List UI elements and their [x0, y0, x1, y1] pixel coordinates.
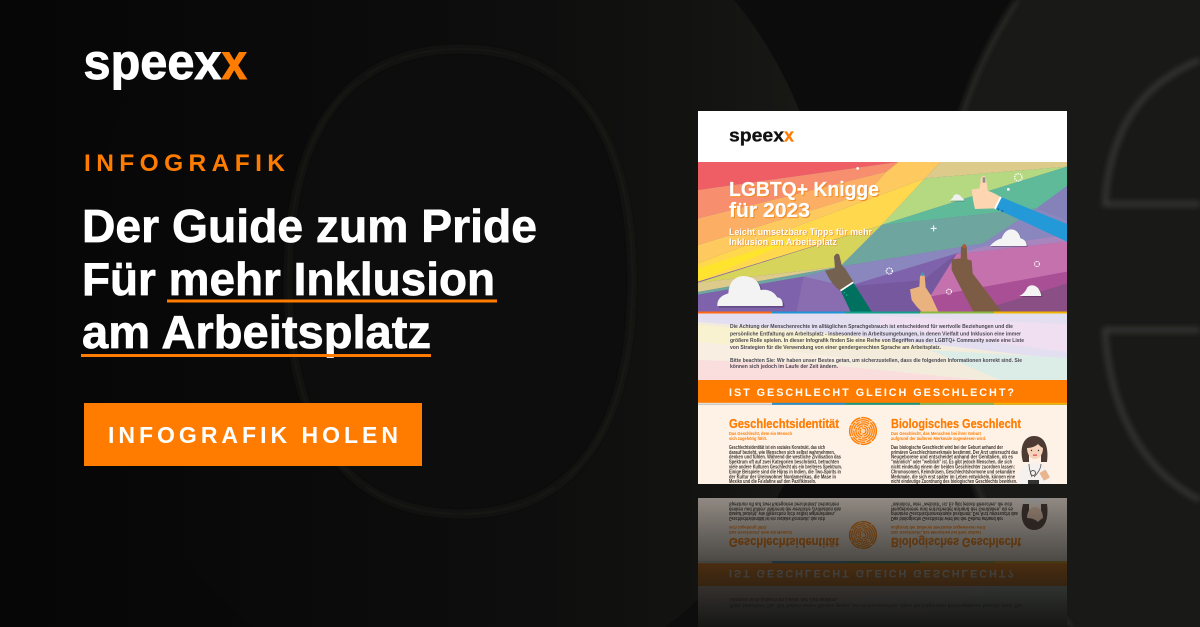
column: Biologisches Geschlecht: [891, 417, 1022, 485]
panel: intro text on pastel stripes: größere Rolle spielen. In dieser Infografik finden Sie eine Reihe von Begriffen aus der LGBTQ+ Community sowie eine Liste: [730, 338, 1025, 344]
logo: speexx: speex: [84, 34, 222, 90]
hero subtitle: Inklusion am Arbeitsplatz: [729, 237, 837, 247]
main headline: Der Guide zum Pride: [82, 200, 537, 252]
column: Biologisches Geschlecht: "männlich" oder "weiblich" ist. Es gibt jedoch Menschen, die sich: [891, 460, 1012, 466]
document header with logo: speex: [729, 124, 785, 146]
hero title: für 2023: [729, 199, 810, 222]
mirrored reflection of the document: Geschlechtsidentität: [729, 535, 840, 549]
column: Biologisches Geschlecht: Chromosomen, Keimdrüsen, Geschlechtshormone und sekundäre: [891, 469, 1015, 475]
logo: speexx: x: [222, 34, 247, 90]
column: Geschlechtsidentität: Mexiko und die Fa'afafine auf den Pazifikinseln.: [729, 479, 816, 485]
mirrored reflection of the document: "männlich" oder "weiblich" ist. Es gibt jedoch Menschen, die sich: [891, 500, 1012, 506]
section banner: IST GESCHLECHT GLEICH GESCHLECHT?: [729, 387, 1014, 399]
mirrored reflection of the document: können sich jedoch im Laufe der Zeit ändern.: [730, 596, 838, 602]
icon: sparkles: [856, 167, 1039, 294]
hero title: LGBTQ+ Knigge: [729, 178, 879, 201]
mirrored reflection of the document: Das biologische Geschlecht wird bei der Geburt anhand der: [891, 515, 1003, 521]
column: Geschlechtsidentität: [729, 417, 842, 485]
mirrored reflection of the document: darauf bezieht, wie Menschen sich selbst wahrnehmen,: [729, 510, 835, 516]
column: Biologisches Geschlecht: primären Geschlechtsmerkmale bestimmt. Der Arzt untersucht das: [891, 450, 1018, 456]
column: Geschlechtsidentität: darauf bezieht, wie Menschen sich selbst wahrnehmen,: [729, 450, 835, 456]
panel: intro text on pastel stripes: Die Achtung der Menschenrechte im alltäglichen Sprachgebrauch ist entscheidend für wertvolle Beziehungen und die: [730, 324, 1014, 330]
section banner: [698, 380, 1067, 405]
eyebrow label: INFOGRAFIK: [84, 150, 285, 177]
column: Geschlechtsidentität: denken und fühlen. Während die westliche Zivilisation das: [729, 455, 841, 461]
mirrored reflection of the document: aufgrund der äußeren Merkmale zugewiesen wird.: [891, 525, 986, 530]
column: Geschlechtsidentität: Geschlechtsidentität: [729, 417, 840, 431]
mirrored reflection of the document: Spektrum oft auf zwei Kategorien beschränkt, betrachten: [729, 500, 839, 506]
hero subtitle: Inklusion am Arbeitsplatz: [730, 238, 838, 248]
mirrored reflection of the document: denken und fühlen. Während die westliche Zivilisation das: [729, 505, 841, 511]
hero title: LGBTQ+ Knigge: [730, 179, 880, 202]
hero subtitle: Leicht umsetzbare Tipps für mehr: [730, 228, 873, 238]
icon: clouds: [717, 194, 1042, 308]
panel: intro text on pastel stripes: von Strategien für die Verwendung von einer gendergerechten Sprache am Arbeitsplatz.: [730, 345, 941, 351]
main headline: [81, 200, 537, 358]
mirrored reflection of the document: Neugeborene und entscheidet anhand der Genitalien, ob es: [891, 505, 1013, 511]
mirrored reflection of the document: sich zugehörig fühlt.: [729, 525, 767, 530]
document header with logo: [698, 111, 1067, 162]
icon: fingerprint: [849, 417, 877, 445]
hero title: für 2023: [730, 200, 811, 223]
column: Biologisches Geschlecht: nicht eindeutige Zuordnung des biologischen Geschlechts bewirken.: [891, 479, 1017, 485]
panel: intro text on pastel stripes: können sich jedoch im Laufe der Zeit ändern.: [730, 364, 838, 370]
panel: intro text on pastel stripes: persönliche Entfaltung am Arbeitsplatz - insbesondere in Arbeitsumgebungen, in denen Vielfalt und Inklusion eine immer: [730, 332, 1022, 338]
icon: hand with green sleeve: [825, 254, 872, 312]
column: Geschlechtsidentität: sich zugehörig fühlt.: [729, 436, 767, 441]
panel: intro text on pastel stripes: [698, 314, 1067, 380]
main headline: am Arbeitsplatz: [82, 306, 431, 358]
rainbow divider under hero: [698, 312, 1067, 314]
column: Geschlechtsidentität: Einige Beispiele sind die Hijras in Indien, die Two-Spirits in: [729, 469, 841, 475]
mirrored reflection of the document: Bitte beachten Sie: Wir haben unser Bestes getan, um sicherzustellen, dass die folgenden Informationen korrekt sind. Sie: [730, 602, 1023, 608]
mirrored reflection of the document: primären Geschlechtsmerkmale bestimmt. Der Arzt untersucht das: [891, 510, 1018, 516]
icon: hand peach: [910, 273, 938, 312]
mirrored reflection of the document: [698, 498, 1067, 627]
hero title: [729, 180, 880, 218]
main headline: Für mehr Inklusion: [82, 253, 495, 305]
panel: definitions: [698, 405, 1067, 485]
column: Biologisches Geschlecht: Neugeborene und entscheidet anhand der Genitalien, ob es: [891, 455, 1013, 461]
column: Biologisches Geschlecht: nicht eindeutig einem der beiden Geschlechter zuordnen lassen:: [891, 464, 1015, 470]
panel: intro text on pastel stripes: Bitte beachten Sie: Wir haben unser Bestes getan, um sicherzustellen, dass die folgenden Informationen korrekt sind. Sie: [730, 358, 1023, 364]
icon: hand brown: [952, 244, 1002, 312]
column: Biologisches Geschlecht: Das Geschlecht, das Menschen bei ihrer Geburt: [891, 431, 981, 436]
column: Biologisches Geschlecht: aufgrund der äußeren Merkmale zugewiesen wird.: [891, 436, 986, 441]
column: Biologisches Geschlecht: Biologisches Geschlecht: [891, 417, 1022, 431]
hero subtitle: [729, 227, 873, 248]
mirrored reflection of the document: Geschlechtsidentität ist ein soziales Konstrukt, das sich: [729, 515, 825, 521]
call to action button: INFOGRAFIK HOLEN: [108, 422, 398, 448]
mirrored reflection of the document: Biologisches Geschlecht: [891, 535, 1022, 549]
column: Geschlechtsidentität: Geschlechtsidentität ist ein soziales Konstrukt, das sich: [729, 445, 825, 451]
mirrored reflection of the document: Das Geschlecht, das Menschen bei ihrer Geburt: [891, 530, 981, 535]
column: Geschlechtsidentität: der Kultur der Ureinwohner Nordamerikas, die Mase in: [729, 474, 836, 480]
hero: rainbow illustration: [698, 162, 1067, 312]
hero subtitle: Leicht umsetzbare Tipps für mehr: [729, 227, 872, 237]
infographic document preview: [698, 111, 1067, 485]
icon: hand with blue sleeve: [972, 176, 1067, 242]
call to action button: [84, 403, 422, 466]
mirrored reflection of the document: Das Geschlecht, dem ein Mensch: [729, 530, 792, 535]
column: Geschlechtsidentität: Spektrum oft auf zwei Kategorien beschränkt, betrachten: [729, 460, 839, 466]
column: Biologisches Geschlecht: Merkmale, die sich erst später im Leben entwickeln, können eine: [891, 474, 1015, 480]
column: Geschlechtsidentität: viele andere Kulturen Geschlecht als ein breiteres Spektrum.: [729, 464, 842, 470]
document header with logo: x: [784, 124, 795, 146]
icon: doctor character: [1019, 436, 1050, 484]
column: Geschlechtsidentität: Das Geschlecht, dem ein Mensch: [729, 431, 792, 436]
mirrored reflection of the document: IST GESCHLECHT GLEICH GESCHLECHT?: [729, 567, 1014, 579]
column: Biologisches Geschlecht: Das biologische Geschlecht wird bei der Geburt anhand der: [891, 445, 1003, 451]
